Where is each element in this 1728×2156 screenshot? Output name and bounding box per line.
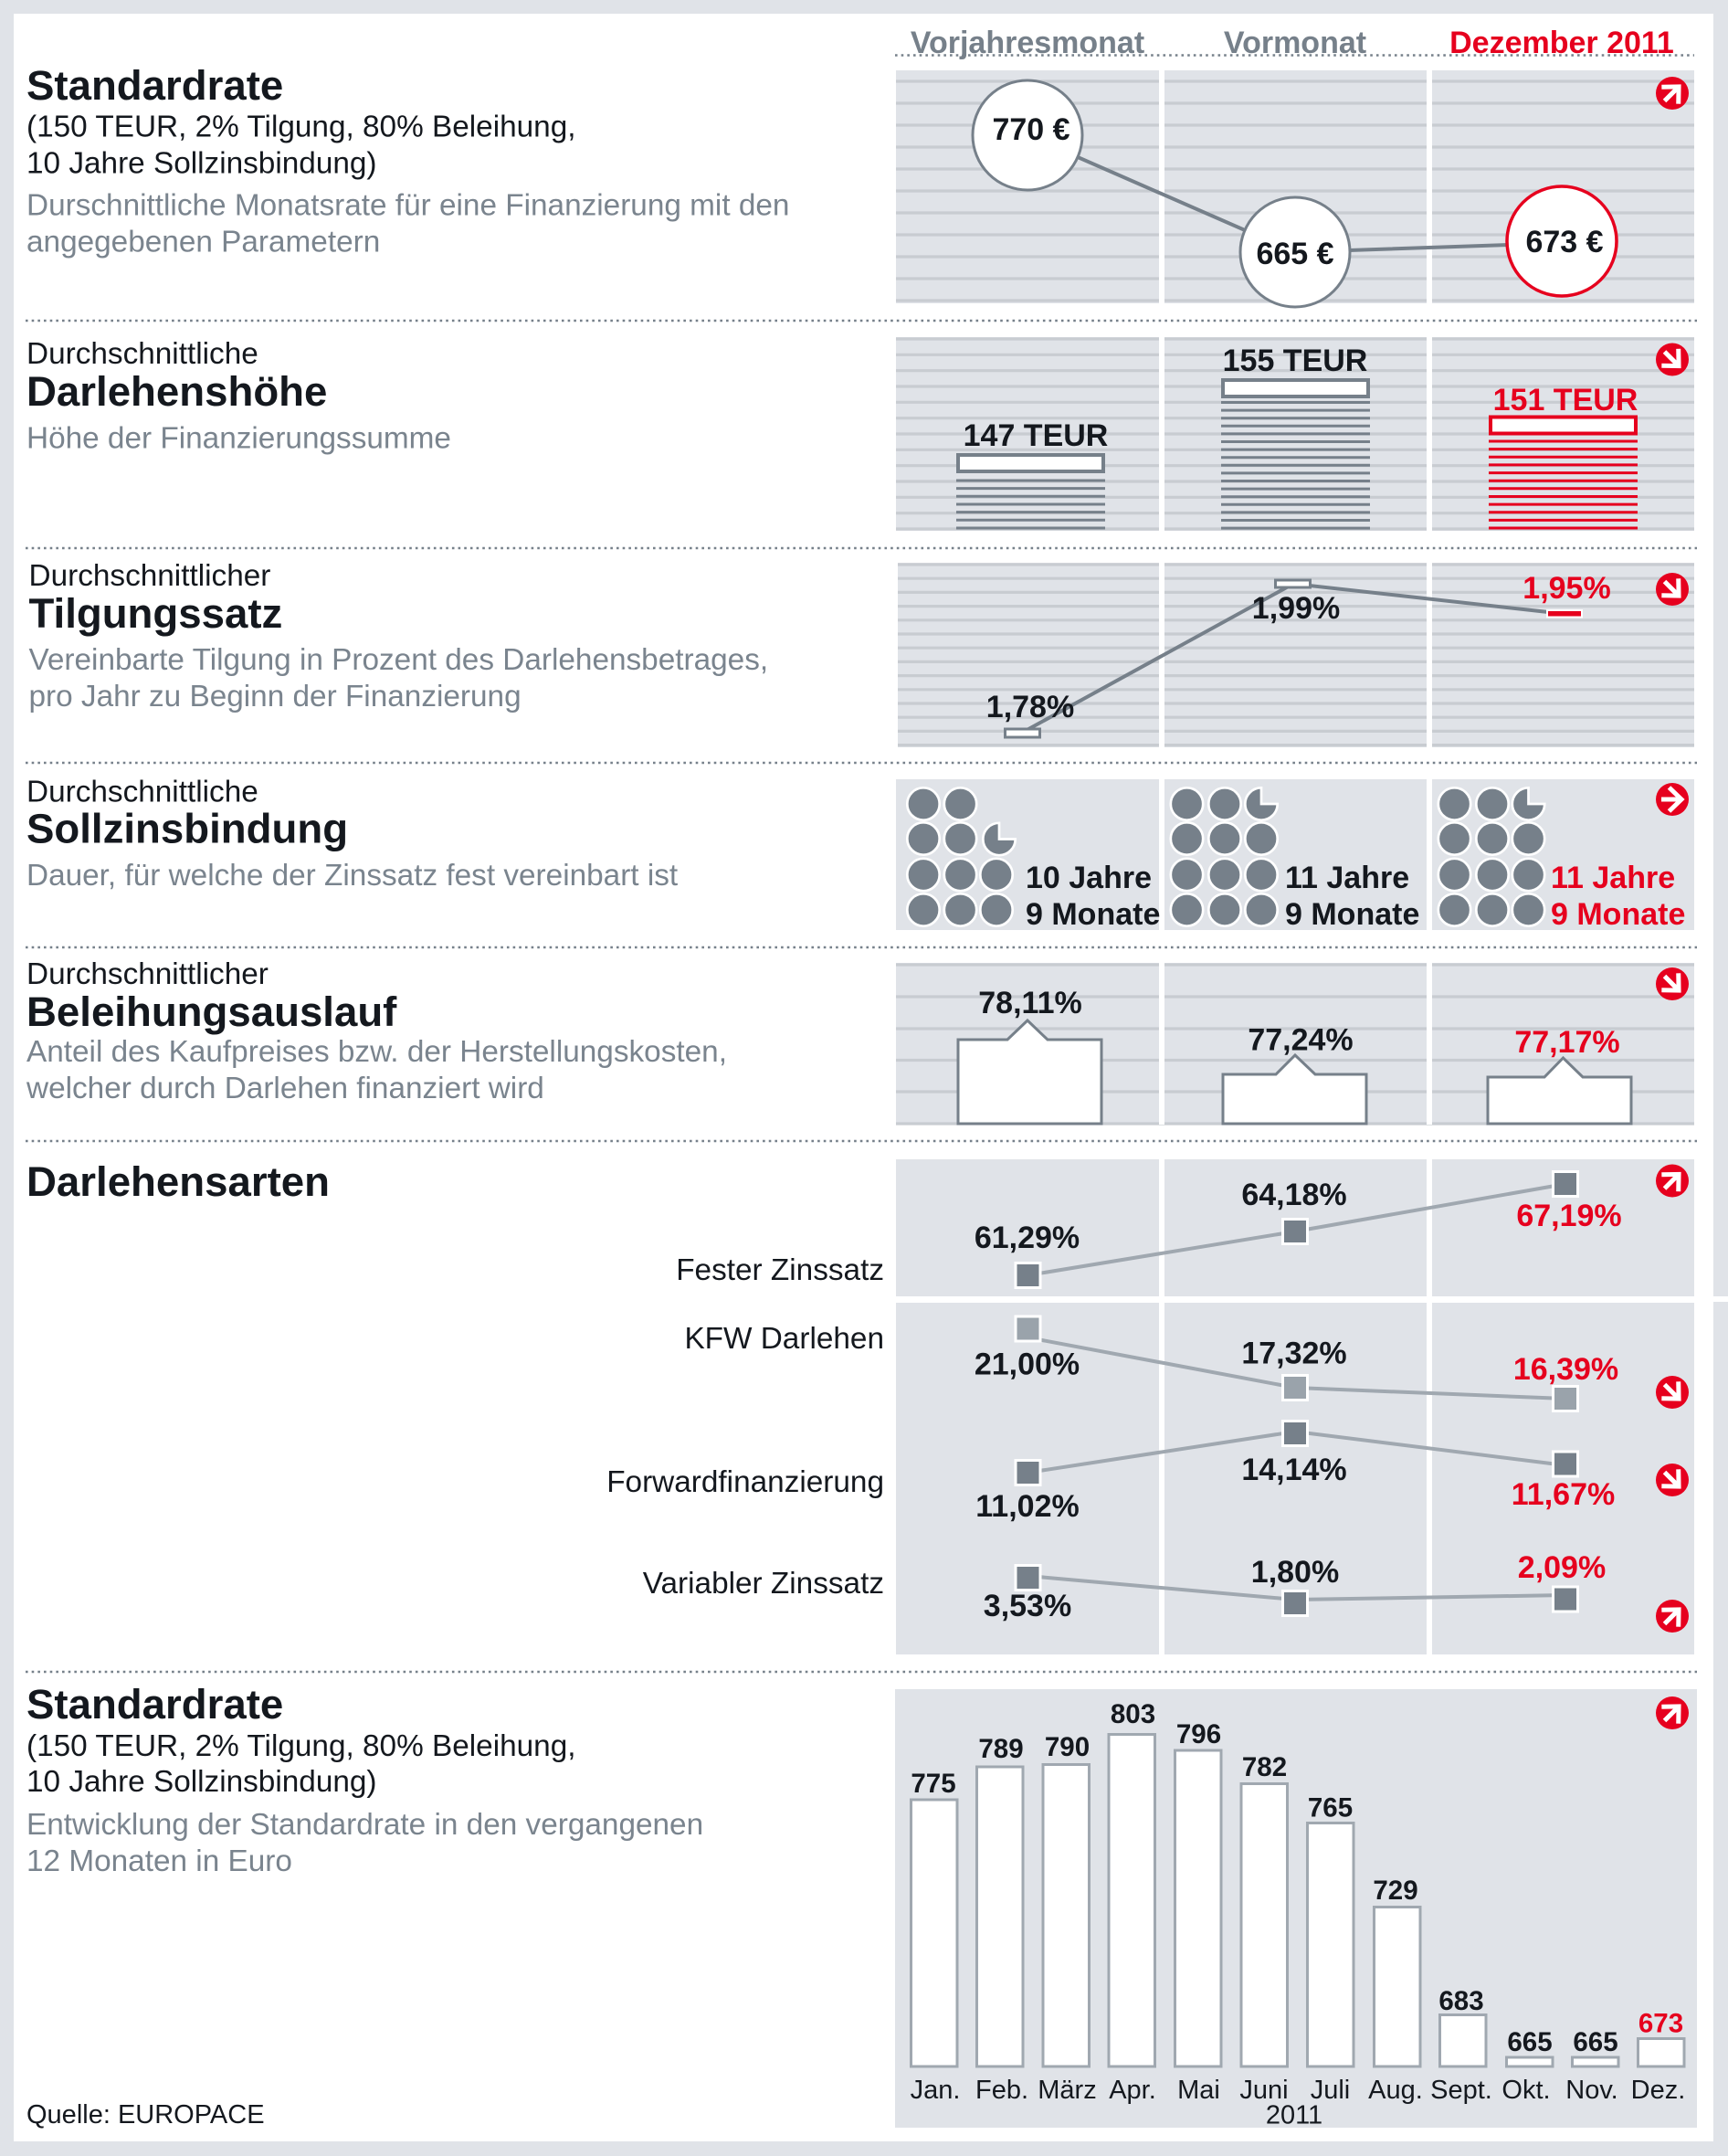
column headers: Vormonat	[1224, 26, 1366, 60]
bar chart: 12 months: Feb.	[975, 2076, 1028, 2105]
chart: loan-to-value houses: 78,11%	[978, 986, 1082, 1020]
parameters text: (150 TEUR, 2% Tilgung, 80% Beleihung,	[26, 1729, 576, 1763]
heading: Sollzinsbindung: Durchschnittliche	[26, 775, 258, 809]
chart: monthly rate circles	[896, 70, 1694, 307]
bar chart: 12 months: Aug.	[1368, 2076, 1423, 2105]
icon: arrow down, KFW Darlehen	[1649, 1369, 1695, 1415]
chart: loan-to-value houses: 77,17%	[1514, 1025, 1620, 1060]
chart: years as dots: 11 Jahre	[1285, 861, 1409, 895]
chart: years as dots: 10 Jahre	[1026, 861, 1152, 895]
bar chart: 12 months: 665	[1507, 2027, 1553, 2057]
description: angegebenen Parametern	[26, 225, 380, 259]
heading: Darlehenshöhe: Durchschnittliche	[26, 337, 258, 371]
heading: Sollzinsbindung	[26, 775, 348, 851]
parameters text: 10 Jahre Sollzinsbindung)	[26, 1765, 377, 1799]
bar chart: 12 months: März	[1038, 2076, 1097, 2105]
bar chart: 12 months: Juni	[1239, 2076, 1289, 2105]
bar chart: 12 months: 765	[1308, 1792, 1353, 1823]
bar chart: 12 months: 775	[911, 1769, 956, 1799]
chart: repayment rate line	[898, 563, 1694, 747]
heading: Tilgungssatz	[29, 559, 282, 637]
dots: Vormonat	[1171, 787, 1278, 926]
series: Variabler Zinssatz	[984, 1550, 1606, 1623]
chart: years as dots: 11 Jahre	[1551, 861, 1675, 895]
series: Variabler Zinssatz: 1,80%	[1251, 1555, 1339, 1590]
panel: Darlehenshöhe	[26, 336, 1695, 531]
heading: Beleihungsauslauf: Beleihungsauslauf	[26, 988, 397, 1035]
description: welcher durch Darlehen finanziert wird	[26, 1072, 544, 1105]
description	[26, 1035, 727, 1105]
chart: loan amount stacks: 147 TEUR	[964, 418, 1108, 453]
heading: Darlehenshöhe: Darlehenshöhe	[26, 368, 327, 415]
icon: arrow down, Forwardfinanzierung	[1649, 1457, 1695, 1503]
heading: Standardrate: Standardrate	[26, 62, 283, 109]
row labels: Forwardfinanzierung	[606, 1465, 884, 1499]
description: Dauer, für welche der Zinssatz fest vereinbart ist	[26, 859, 679, 893]
bar chart: 12 months: Mai	[1177, 2076, 1220, 2105]
row labels: KFW Darlehen	[684, 1322, 884, 1356]
bar chart: 12 months: 789	[978, 1734, 1024, 1764]
bar chart: 12 months: Jan.	[911, 2076, 960, 2105]
series: Forwardfinanzierung: 11,02%	[975, 1489, 1080, 1524]
heading: Beleihungsauslauf	[26, 957, 397, 1035]
bar chart: 12 months: Sept.	[1430, 2076, 1492, 2105]
bar chart: 12 months: 683	[1438, 1986, 1484, 2016]
series: Variabler Zinssatz: 2,09%	[1518, 1550, 1606, 1585]
parameters text: (150 TEUR, 2% Tilgung, 80% Beleihung,	[26, 110, 576, 144]
column headers: Dezember 2011	[1449, 26, 1674, 60]
chart: loan amount stacks: 151 TEUR	[1493, 383, 1638, 417]
chart: years as dots: 9 Monate	[1026, 897, 1160, 932]
bar chart: 12 months: 2011	[1266, 2101, 1322, 2130]
series: KFW Darlehen: 16,39%	[1513, 1352, 1618, 1387]
bar chart: 12 months: 665	[1573, 2027, 1618, 2057]
panel: Standardrate development	[26, 1681, 1697, 2130]
chart: repayment rate line: 1,95%	[1523, 571, 1611, 606]
series: Forwardfinanzierung: 11,67%	[1512, 1477, 1615, 1512]
icon: arrow up	[1649, 70, 1695, 116]
heading: Sollzinsbindung: Sollzinsbindung	[26, 806, 348, 851]
chart: loan-to-value houses	[896, 963, 1694, 1125]
panel: Standardrate top	[26, 62, 1695, 307]
panel: Beleihungsauslauf	[26, 957, 1695, 1125]
column headers: Vorjahresmonat	[911, 26, 1144, 60]
series: Forwardfinanzierung: 14,14%	[1241, 1453, 1347, 1487]
row labels	[606, 1253, 884, 1601]
series: Forwardfinanzierung	[975, 1421, 1615, 1524]
heading: Tilgungssatz: Tilgungssatz	[29, 590, 282, 637]
description	[26, 188, 789, 259]
series: Fester Zinssatz: 64,18%	[1241, 1178, 1347, 1212]
description: Vereinbarte Tilgung in Prozent des Darlehensbetrages,	[29, 643, 768, 677]
chart: loan amount stacks	[896, 337, 1694, 531]
chart: years as dots: 9 Monate	[1285, 897, 1419, 932]
dots: Dezember 2011	[1438, 787, 1544, 926]
description: Höhe der Finanzierungssumme	[26, 422, 451, 455]
chart: years as dots: 9 Monate	[1551, 897, 1685, 932]
parameters text	[26, 1729, 576, 1799]
chart: monthly rate circles: 665 €	[1256, 237, 1334, 271]
description: 12 Monaten in Euro	[26, 1844, 292, 1878]
heading: Tilgungssatz: Durchschnittlicher	[29, 559, 270, 593]
bar chart: 12 months: Okt.	[1501, 2076, 1551, 2105]
panel: Darlehensarten	[26, 1157, 1695, 1654]
icon: arrow right	[1656, 783, 1689, 816]
row labels: Variabler Zinssatz	[643, 1567, 884, 1601]
chart: repayment rate line: 1,99%	[1252, 591, 1340, 626]
icon: arrow down	[1649, 961, 1695, 1007]
icon: arrow up	[1649, 1690, 1695, 1736]
bar chart: 12 months: 729	[1373, 1876, 1418, 1906]
bar chart: 12 months: Juli	[1311, 2076, 1350, 2105]
dots: Vorjahresmonat	[907, 787, 1016, 926]
bar chart: 12 months: Dez.	[1631, 2076, 1685, 2105]
row labels: Fester Zinssatz	[676, 1253, 884, 1287]
bar chart: 12 months: 796	[1176, 1719, 1221, 1749]
chart: loan type lines	[896, 1159, 1694, 1654]
parameters text: 10 Jahre Sollzinsbindung)	[26, 146, 377, 181]
icon: arrow up, Variabler Zinssatz	[1649, 1593, 1695, 1639]
description: Anteil des Kaufpreises bzw. der Herstellungskosten,	[26, 1035, 727, 1069]
chart: loan-to-value houses: 77,24%	[1248, 1023, 1354, 1058]
bar chart: 12 months: Nov.	[1565, 2076, 1618, 2105]
bar chart: 12 months: 803	[1111, 1699, 1155, 1729]
panel: Sollzinsbindung	[26, 775, 1694, 932]
series: Fester Zinssatz: 61,29%	[975, 1221, 1080, 1255]
description: pro Jahr zu Beginn der Finanzierung	[29, 680, 522, 713]
description: Entwicklung der Standardrate in den vergangenen	[26, 1808, 703, 1842]
heading: Beleihungsauslauf: Durchschnittlicher	[26, 957, 269, 991]
column headers	[895, 26, 1694, 60]
chart: loan amount stacks: 155 TEUR	[1223, 343, 1367, 378]
series: KFW Darlehen	[975, 1316, 1618, 1411]
series: Fester Zinssatz	[975, 1171, 1622, 1288]
icon: arrow up, Fester Zinssatz	[1649, 1157, 1695, 1204]
source: Quelle: EUROPACE	[26, 2100, 265, 2130]
panel: Tilgungssatz	[29, 559, 1695, 747]
series: KFW Darlehen: 21,00%	[975, 1347, 1080, 1381]
description	[26, 1808, 703, 1878]
parameters text	[26, 110, 576, 181]
description	[29, 643, 768, 713]
description: Durschnittliche Monatsrate für eine Finanzierung mit den	[26, 188, 789, 223]
chart: repayment rate line: 1,78%	[986, 690, 1074, 724]
bar chart: 12 months: 782	[1242, 1752, 1287, 1782]
chart: monthly rate circles: 673 €	[1525, 225, 1604, 259]
bar chart: 12 months	[895, 1689, 1697, 2130]
icon: arrow down	[1649, 336, 1695, 383]
bar chart: 12 months: 673	[1638, 2008, 1683, 2039]
bar chart: 12 months: Apr.	[1109, 2076, 1156, 2105]
series: KFW Darlehen: 17,32%	[1241, 1336, 1347, 1370]
bar chart: 12 months: 790	[1045, 1732, 1090, 1762]
icon: arrow down	[1649, 566, 1695, 612]
heading: Standardrate: Standardrate	[26, 1681, 283, 1728]
series: Variabler Zinssatz: 3,53%	[984, 1589, 1071, 1623]
heading: Darlehensarten: Darlehensarten	[26, 1158, 330, 1205]
heading: Darlehenshöhe	[26, 337, 327, 415]
chart: monthly rate circles: 770 €	[992, 112, 1070, 147]
chart: years as dots	[896, 779, 1694, 932]
series: Fester Zinssatz: 67,19%	[1516, 1199, 1622, 1233]
